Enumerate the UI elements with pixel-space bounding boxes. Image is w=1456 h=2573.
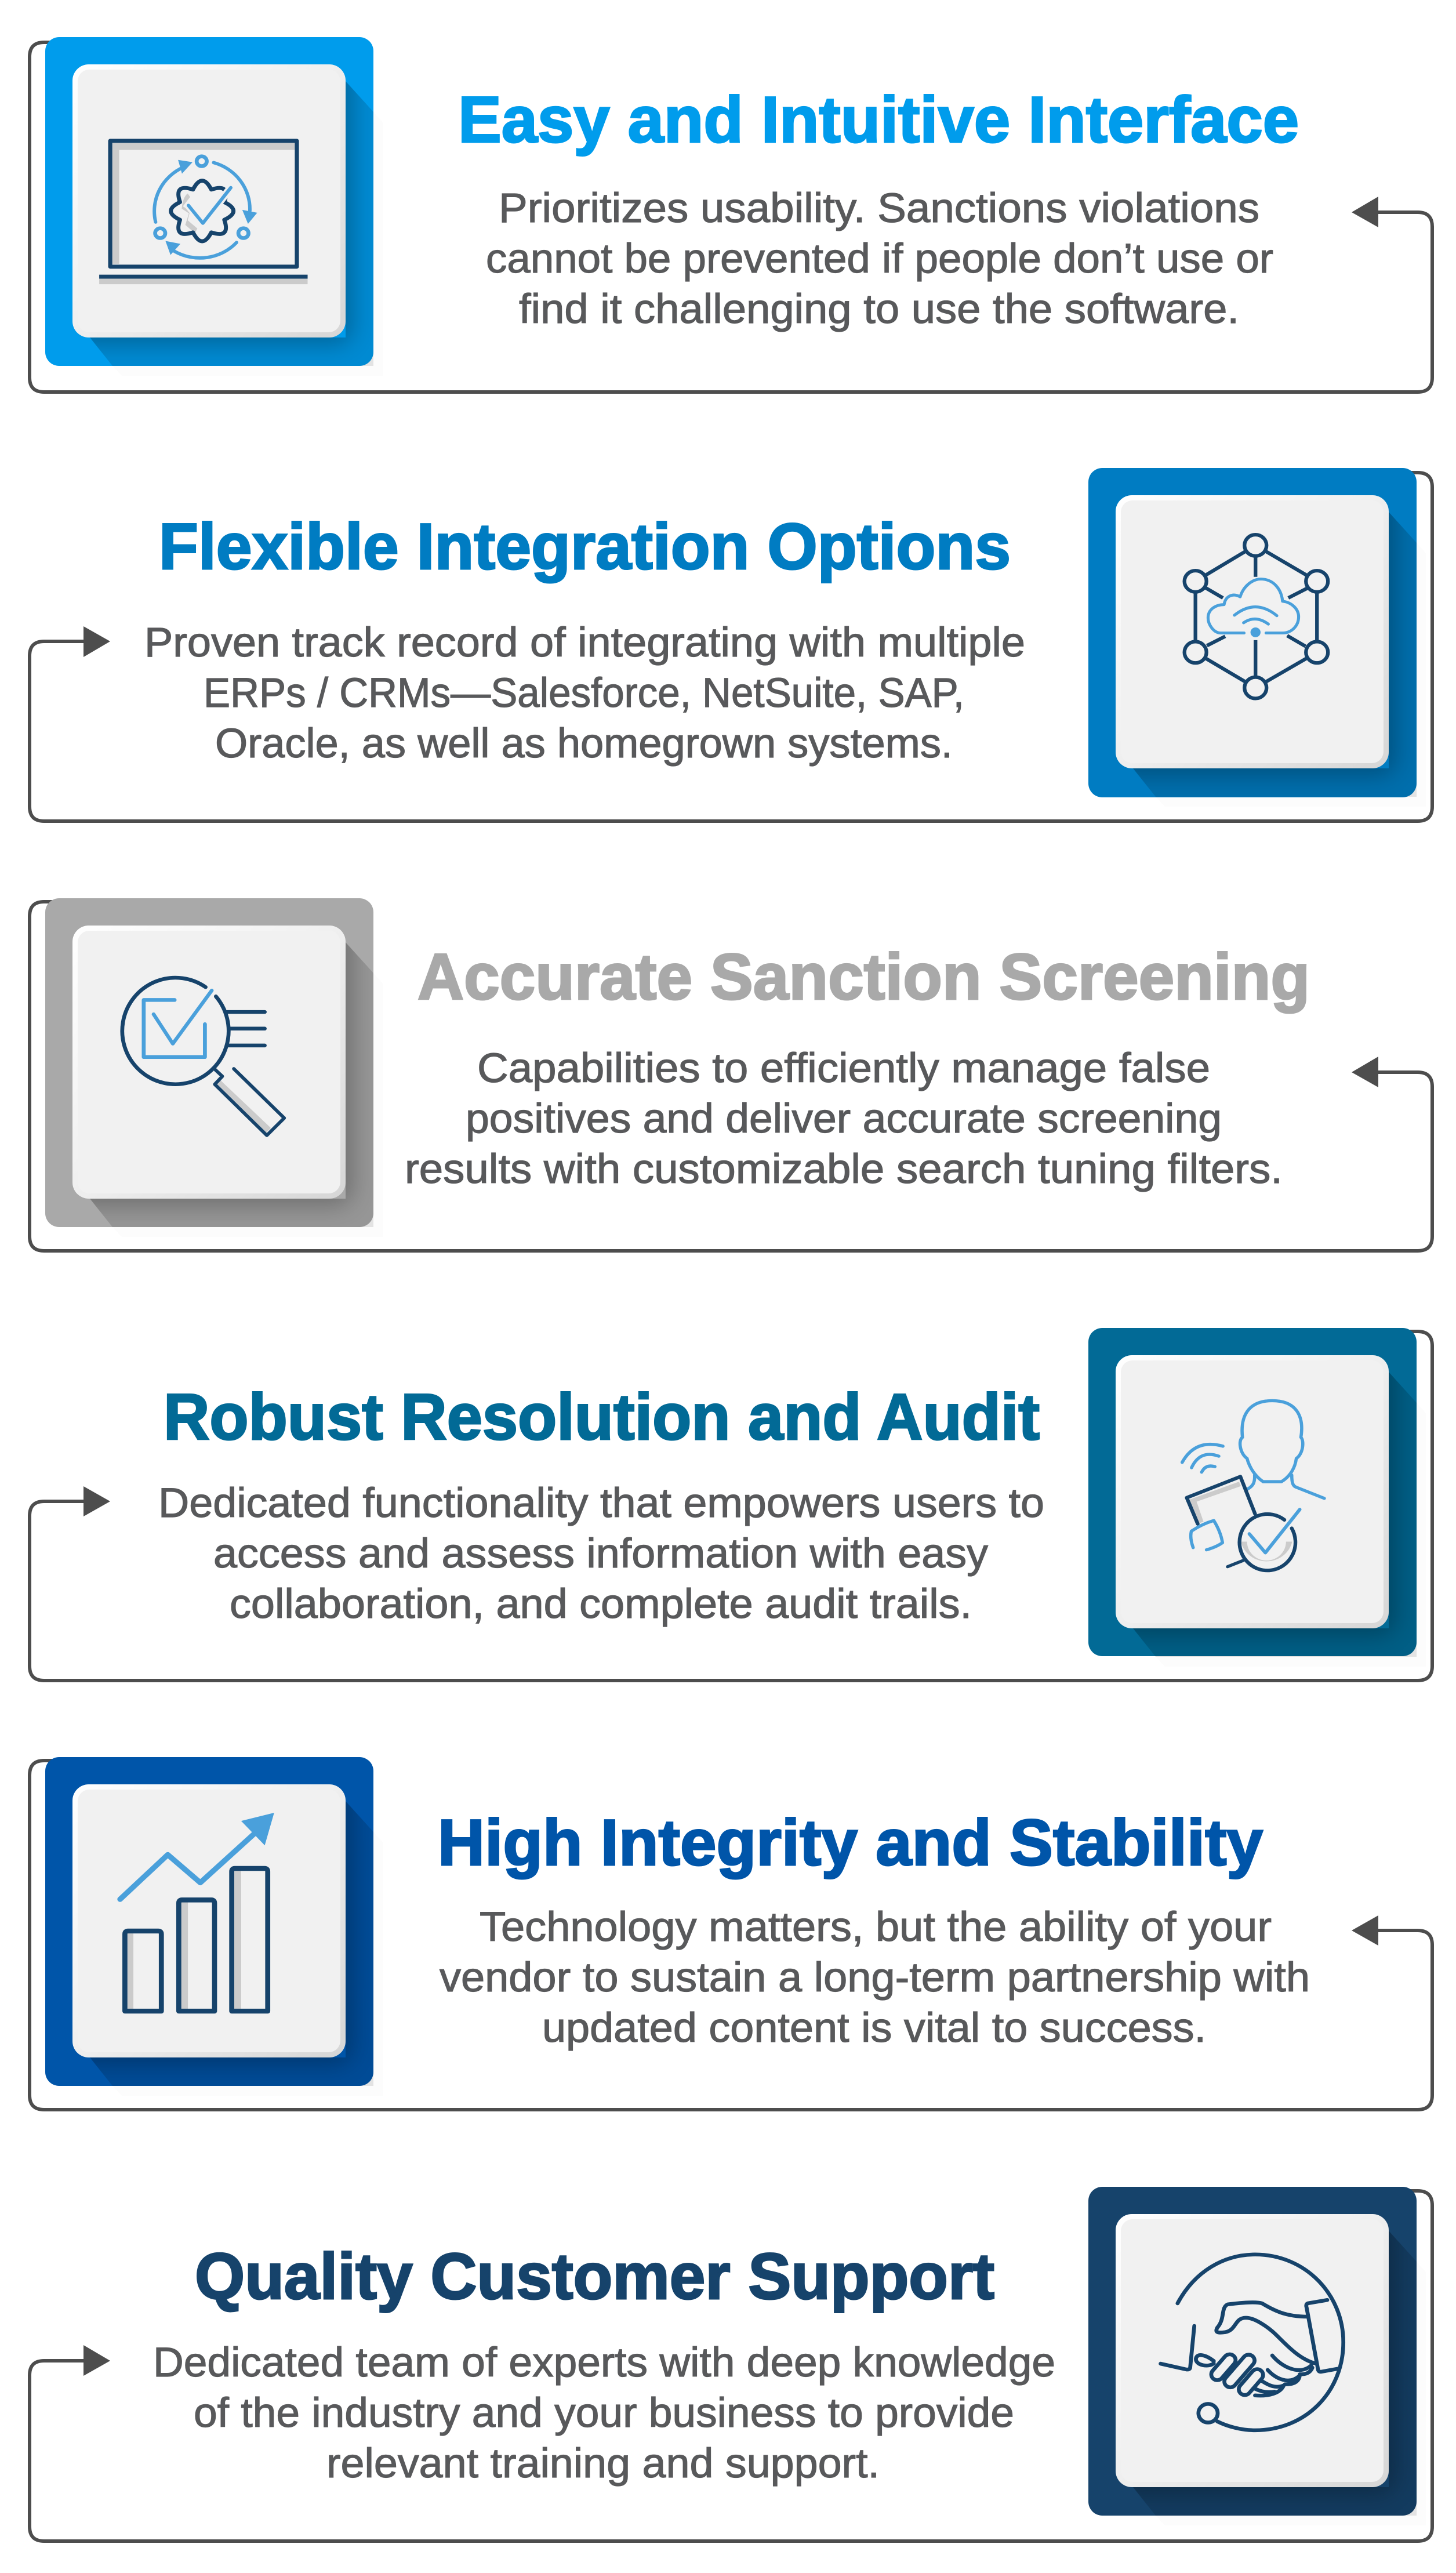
body text: find it challenging to use the software. <box>519 286 1239 332</box>
body text: Dedicated team of experts with deep knowledge <box>153 2340 1055 2386</box>
icon tile <box>1088 2187 1426 2525</box>
panel: Easy and Intuitive Interface <box>30 37 1432 392</box>
panel: High Integrity and Stability <box>30 1757 1432 2110</box>
icon: handshake <box>1161 2255 1344 2430</box>
icon tile <box>45 1757 383 2096</box>
body text: Technology matters, but the ability of your <box>480 1904 1272 1950</box>
connector outline with arrow <box>30 902 1432 1251</box>
connector outline with arrow <box>30 1331 1432 1681</box>
panel: Quality Customer Support <box>30 2187 1432 2541</box>
body text: Oracle, as well as homegrown systems. <box>215 721 953 767</box>
heading: Accurate Sanction Screening <box>417 941 1310 1013</box>
body text: results with customizable search tuning filters. <box>405 1146 1283 1192</box>
body text: Capabilities to efficiently manage false <box>477 1046 1210 1091</box>
connector outline with arrow <box>30 1761 1432 2110</box>
heading: High Integrity and Stability <box>438 1806 1263 1879</box>
icon: cloud network <box>1185 535 1328 698</box>
body text: Proven track record of integrating with multiple <box>144 620 1025 666</box>
panel: Flexible Integration Options <box>30 468 1432 821</box>
heading: Easy and Intuitive Interface <box>458 84 1299 156</box>
body text: vendor to sustain a long-term partnership with <box>440 1955 1310 2001</box>
body text: Prioritizes usability. Sanctions violations <box>499 186 1259 231</box>
body text: Dedicated functionality that empowers users to <box>158 1480 1044 1526</box>
icon tile <box>45 37 383 376</box>
body text: updated content is vital to success. <box>542 2005 1206 2051</box>
icon: rising bar chart <box>120 1813 274 2011</box>
icon tile <box>1088 468 1426 807</box>
icon: laptop with gear <box>99 141 308 284</box>
icon tile <box>45 898 383 1237</box>
body text: collaboration, and complete audit trails. <box>230 1581 972 1627</box>
connector outline with arrow <box>30 42 1432 392</box>
heading: Robust Resolution and Audit <box>164 1381 1040 1453</box>
heading: Flexible Integration Options <box>159 510 1011 583</box>
panel: Accurate Sanction Screening <box>30 898 1432 1251</box>
icon: person with tablet and check <box>1182 1400 1324 1570</box>
body text: of the industry and your business to provide <box>194 2390 1014 2436</box>
body text: access and assess information with easy <box>213 1531 989 1577</box>
body text: ERPs / CRMs—Salesforce, NetSuite, SAP, <box>204 670 964 716</box>
body text: relevant training and support. <box>326 2441 880 2487</box>
icon: magnifier with checkbox <box>122 978 284 1135</box>
body text: cannot be prevented if people don’t use or <box>486 236 1273 282</box>
connector outline with arrow <box>30 2191 1432 2541</box>
heading: Quality Customer Support <box>195 2240 994 2313</box>
icon tile <box>1088 1328 1426 1667</box>
body text: positives and deliver accurate screening <box>466 1096 1222 1142</box>
panel: Robust Resolution and Audit <box>30 1328 1432 1681</box>
connector outline with arrow <box>30 473 1432 821</box>
